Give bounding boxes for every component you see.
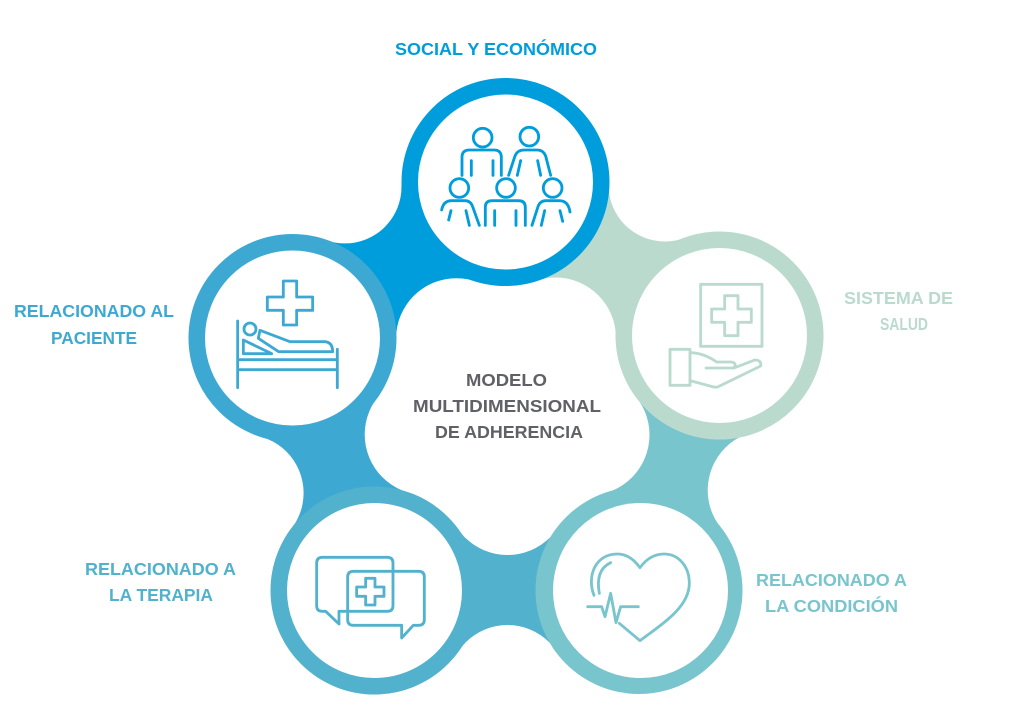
label: patient: PACIENTE <box>51 328 137 348</box>
panel: social and economic circle <box>410 86 601 278</box>
connector: condition to health system <box>589 336 768 590</box>
center title: MODELO <box>466 370 547 390</box>
connector: patient to therapy <box>245 338 425 590</box>
label: patient: RELACIONADO AL <box>14 301 174 321</box>
connector: health system to social <box>505 182 720 338</box>
icon: hand holding medical sign <box>670 284 762 387</box>
panel: patient circle <box>197 242 388 434</box>
label: condition <box>756 570 907 616</box>
icon: group of people <box>442 127 570 225</box>
icon: speech bubbles with cross <box>317 557 424 638</box>
heading: social and economic: SOCIAL Y ECONÓMICO <box>395 38 597 59</box>
connector: social to patient <box>292 182 505 339</box>
label: condition: LA CONDICIÓN <box>765 595 898 616</box>
icon: heart with pulse line <box>588 554 689 641</box>
label: therapy: LA TERAPIA <box>109 585 213 605</box>
panel: therapy circle <box>279 495 470 686</box>
panel: condition circle <box>536 487 742 694</box>
label: health system <box>844 288 953 334</box>
center title: DE ADHERENCIA <box>435 422 583 442</box>
connectors between the five circles <box>245 182 768 684</box>
center title: MULTIDIMENSIONAL <box>413 396 601 416</box>
icon: patient in hospital bed with cross <box>238 281 337 388</box>
label: condition: RELACIONADO A <box>756 570 907 590</box>
center title <box>413 370 601 442</box>
white curved cut-outs forming the central blob and outer notches <box>187 128 828 722</box>
label: therapy: RELACIONADO A <box>85 559 236 579</box>
label: health system: SISTEMA DE <box>844 288 953 308</box>
connector: therapy to condition <box>374 494 640 684</box>
label: patient <box>14 301 174 348</box>
label: health system: SALUD <box>880 314 928 334</box>
panel: health system circle <box>624 240 815 431</box>
label: therapy <box>85 559 236 605</box>
